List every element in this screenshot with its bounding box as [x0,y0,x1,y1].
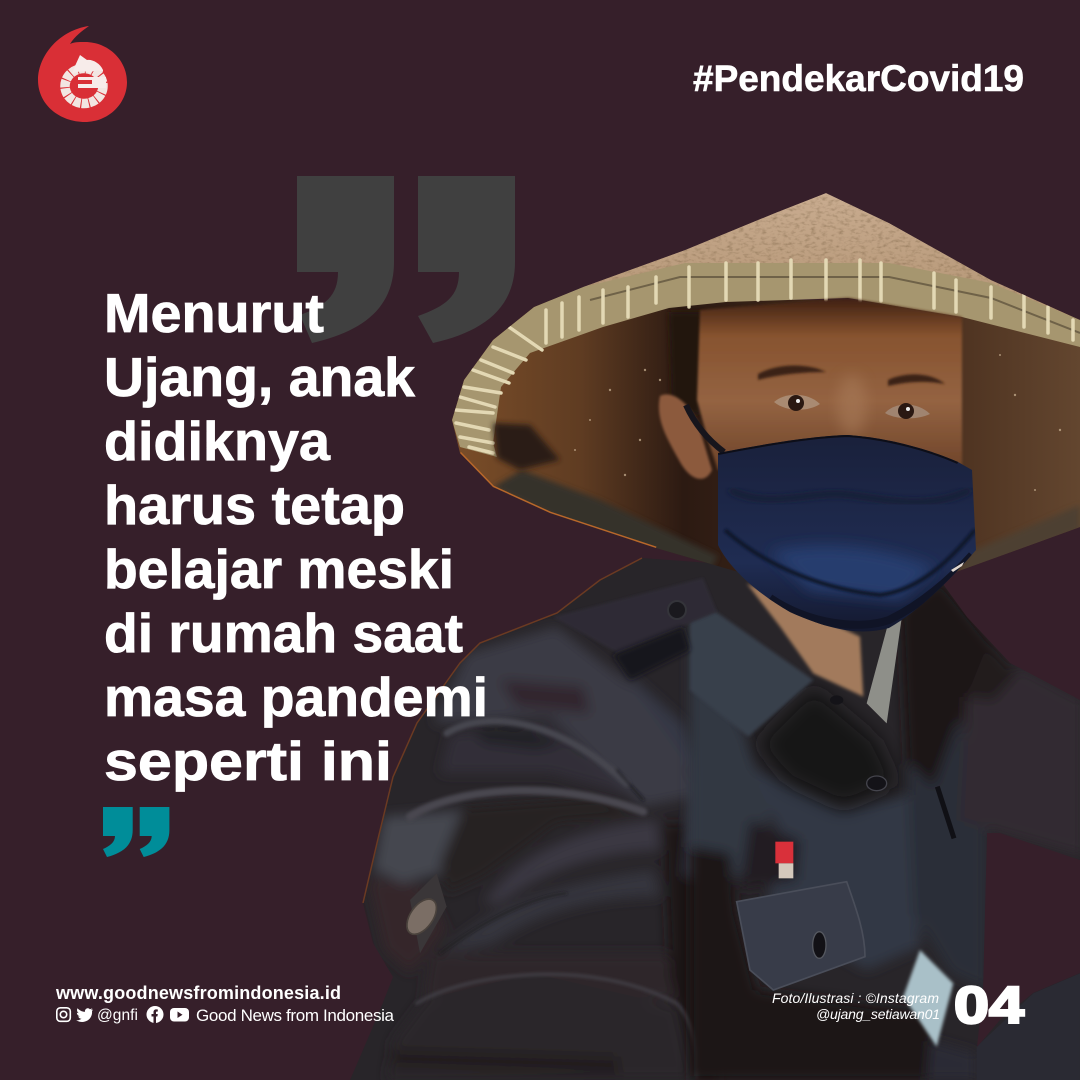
photo credit: @ujang_setiawan01 [816,1006,940,1022]
face features [758,366,945,435]
photo: man with conical hat and mask [340,193,1080,1080]
hat [440,193,1080,600]
hat rim white spot [951,562,964,572]
photo credit: Foto/Ilustrasi : ©Instagram [772,990,939,1006]
logo red mark [38,26,127,122]
pocket [737,882,865,990]
quote text [104,282,488,792]
left sleeve shading [372,626,693,1067]
rim ties [456,260,1073,453]
rim lines [590,277,1080,333]
face skin [697,298,962,470]
epaulette shadow [613,627,690,680]
epaulette strap [553,578,717,653]
quote text: seperti ini [104,730,392,792]
eyebrows [758,366,945,386]
sleeve fold lines [410,721,697,1077]
social handle: @gnfi [97,1007,138,1024]
logo [38,26,127,122]
large background quotation mark [297,176,515,343]
white undershirt strip [866,620,902,724]
shirt dark placket [757,687,897,807]
hat speckles [574,354,1061,491]
icon: twitter [76,1008,93,1022]
icon: youtube [170,1008,189,1022]
eye: right [885,403,930,419]
collar [690,610,813,737]
page number: 04 [954,977,1024,1035]
icon: instagram [57,1008,70,1021]
pen in pocket [937,787,954,838]
website url: www.goodnewsfromindonesia.id [55,983,341,1003]
right torso shading [690,580,1080,1080]
quote text: Ujang, anak [104,346,415,408]
teal closing quotation mark [103,807,169,857]
mask strap [686,405,724,452]
quote text: didiknya [104,410,330,472]
hat cone [584,193,1080,320]
quote text: Menurut [104,282,324,344]
footer: website and social handles [55,983,395,1025]
photo credit [772,990,940,1022]
hat lower band [493,469,716,564]
hat edge highlight [460,453,656,548]
logo emblem [65,55,106,104]
quote text: belajar meski [104,538,454,600]
page name: Good News from Indonesia [196,1006,395,1025]
quote text: harus tetap [104,474,405,536]
ear [659,394,712,479]
face mask [718,435,976,632]
epaulette button [668,601,686,619]
body edge glow [363,558,642,903]
hat underside [452,300,1080,572]
shirt button [867,776,887,791]
neck skin [747,583,863,697]
bottom-right arm [977,973,1080,1080]
nose highlight [837,375,867,435]
jacket and arms [340,550,1080,1080]
sleeve button [406,898,437,935]
light shirt detail [903,950,953,1047]
pocket button [813,932,826,958]
hat rim [452,263,1080,457]
quote text: masa pandemi [104,666,488,728]
quote text: di rumah saat [104,602,463,664]
sleeve strap [410,873,447,953]
icon: facebook [146,1006,164,1023]
pin: Indonesian flag [775,842,793,878]
eye: left [774,395,820,411]
hair shadow [669,312,705,415]
hashtag heading: #PendekarCovid19 [693,58,1024,99]
